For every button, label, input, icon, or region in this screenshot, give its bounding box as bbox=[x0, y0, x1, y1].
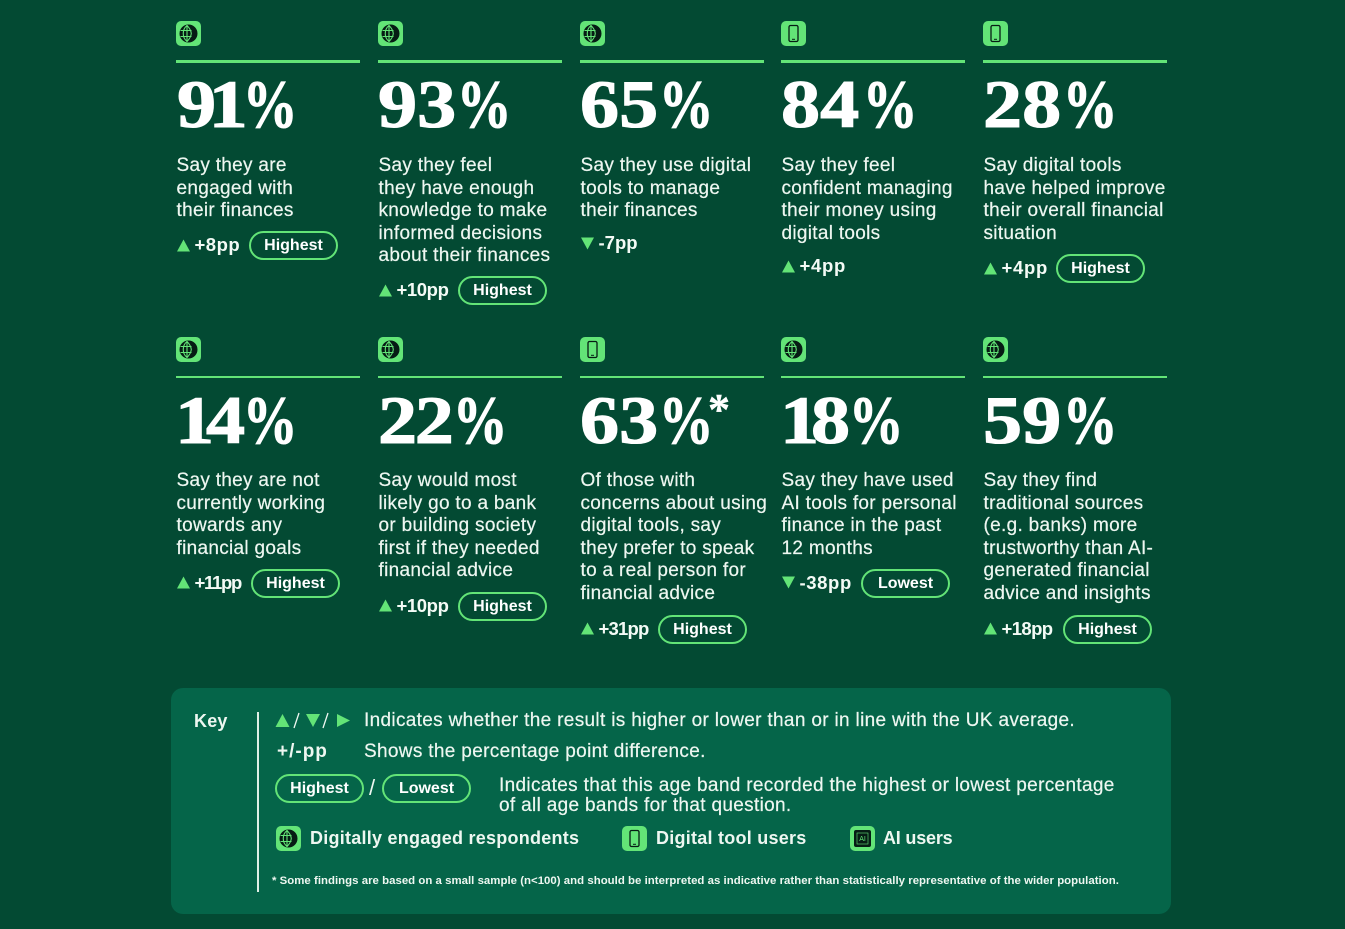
statistic: % bbox=[863, 66, 917, 142]
card: 91% engaged bbox=[176, 21, 360, 260]
legend: AI users: AI users bbox=[883, 828, 952, 848]
description: their money using bbox=[782, 200, 937, 221]
description: their finances bbox=[176, 200, 294, 221]
rule bbox=[580, 60, 764, 62]
description bbox=[378, 155, 550, 266]
statistic: % bbox=[453, 382, 507, 458]
card: 18% AI tools bbox=[781, 336, 965, 636]
delta and badge: +18pp bbox=[1002, 618, 1052, 638]
icon: phone legend bbox=[622, 826, 647, 851]
description: AI tools for personal bbox=[782, 492, 957, 514]
statistic bbox=[580, 66, 713, 142]
card: 65% use digital tools bbox=[580, 21, 764, 253]
description: financial goals bbox=[176, 538, 301, 558]
icon: globe legend bbox=[276, 826, 300, 851]
icon: globe bbox=[176, 21, 201, 46]
rule bbox=[176, 376, 360, 378]
icon: globe bbox=[378, 337, 403, 362]
highest badge bbox=[275, 774, 364, 803]
statistic bbox=[983, 380, 1133, 458]
statistic: 18 bbox=[780, 382, 842, 458]
description: digital tools, say bbox=[580, 515, 721, 536]
statistic: 14 bbox=[175, 382, 237, 458]
description: concerns about using bbox=[580, 492, 767, 514]
description bbox=[580, 470, 767, 604]
delta: -7pp bbox=[598, 232, 638, 253]
lowest badge: Lowest bbox=[399, 780, 454, 797]
delta and badge: +10pp bbox=[396, 279, 448, 300]
description: situation bbox=[984, 222, 1057, 244]
card: 14% no goals bbox=[175, 337, 360, 598]
statistic: % bbox=[1063, 66, 1117, 142]
delta and badge bbox=[379, 592, 547, 621]
delta and badge: Lowest bbox=[878, 574, 933, 592]
description: Say they find bbox=[984, 470, 1097, 491]
delta and badge bbox=[782, 568, 966, 598]
rule bbox=[176, 60, 360, 62]
description bbox=[176, 155, 294, 221]
description: 12 months bbox=[782, 538, 873, 558]
icon: globe bbox=[378, 21, 403, 46]
icon: phone bbox=[781, 21, 806, 46]
description: trustworthy than AI- bbox=[984, 538, 1153, 558]
statistic bbox=[175, 382, 297, 458]
statistic: 93 bbox=[378, 66, 456, 142]
statistic: % bbox=[659, 66, 713, 142]
delta and badge bbox=[177, 231, 338, 260]
description: advice and insights bbox=[984, 582, 1151, 604]
delta bbox=[581, 232, 638, 253]
statistic: 63 bbox=[580, 382, 658, 458]
statistic: 22 bbox=[378, 382, 452, 458]
description: Say they have used bbox=[782, 470, 954, 491]
icon: phone bbox=[580, 337, 605, 362]
card: 84% confident bbox=[781, 21, 965, 276]
statistic bbox=[781, 380, 931, 458]
statistic: 65 bbox=[580, 66, 658, 142]
pp explanation: Shows the percentage point difference. bbox=[364, 741, 706, 762]
delta and badge: Highest bbox=[1071, 260, 1130, 277]
delta and badge: -38pp bbox=[800, 572, 852, 592]
description: engaged with bbox=[176, 178, 293, 198]
icon: AI chip legend bbox=[850, 826, 874, 851]
description: currently working bbox=[176, 492, 325, 514]
statistic: % bbox=[1063, 382, 1117, 458]
statistic bbox=[177, 66, 297, 142]
statistic bbox=[983, 66, 1117, 142]
rule bbox=[983, 376, 1167, 378]
delta and badge: Highest bbox=[673, 620, 732, 638]
delta and badge: Highest bbox=[473, 598, 532, 614]
description: financial advice bbox=[378, 560, 513, 581]
panel: key bbox=[171, 688, 1171, 914]
description: Say digital tools bbox=[984, 155, 1122, 176]
legend: digital tool users: Digital tool users bbox=[656, 828, 807, 848]
card: 22% bank first bbox=[378, 337, 562, 621]
delta and badge: +4pp bbox=[1002, 257, 1048, 278]
statistic bbox=[378, 382, 507, 458]
description: (e.g. banks) more bbox=[984, 515, 1138, 536]
direction explanation: Indicates whether the result is higher or lower than or in line with the UK average. bbox=[364, 710, 1075, 731]
description: tools to manage bbox=[580, 178, 720, 198]
description: traditional sources bbox=[984, 492, 1143, 514]
slash: / bbox=[369, 775, 375, 800]
icon: globe bbox=[781, 336, 806, 362]
delta: +4pp bbox=[800, 255, 846, 276]
delta and badge: Highest bbox=[473, 282, 532, 299]
rule bbox=[378, 376, 562, 378]
description bbox=[580, 155, 751, 221]
lowest badge bbox=[382, 774, 471, 803]
card: 93% knowledge bbox=[378, 21, 562, 305]
description: knowledge to make bbox=[378, 200, 547, 221]
description: to a real person for bbox=[580, 560, 746, 581]
description: Say they are bbox=[176, 155, 287, 176]
description bbox=[378, 470, 540, 581]
card: 28% improved situation bbox=[983, 21, 1167, 283]
statistic: 59 bbox=[983, 382, 1061, 458]
footnote: * Some findings are based on a small sample (n<100) and should be interpreted as indicative rather than statistically representative of the wider population. bbox=[272, 875, 1119, 887]
description bbox=[176, 470, 325, 558]
delta and badge: Highest bbox=[264, 237, 323, 254]
statistic: % bbox=[243, 382, 297, 458]
description: informed decisions bbox=[378, 222, 542, 244]
description bbox=[984, 155, 1166, 244]
delta and badge bbox=[984, 614, 1168, 644]
statistic bbox=[378, 66, 511, 142]
card: 63% real person bbox=[580, 337, 767, 644]
delta and badge: Highest bbox=[1078, 620, 1137, 638]
description bbox=[984, 470, 1153, 605]
badge explanation: Indicates that this age band recorded the highest or lowest percentage bbox=[499, 775, 1115, 796]
description: they prefer to speak bbox=[580, 538, 754, 558]
rule bbox=[781, 376, 965, 378]
description: Say they feel bbox=[782, 155, 895, 176]
description: digital tools bbox=[782, 222, 880, 244]
description: financial advice bbox=[580, 582, 715, 604]
delta and badge: +11pp bbox=[194, 572, 241, 592]
delta and badge bbox=[379, 276, 547, 305]
description: Say they use digital bbox=[580, 155, 751, 176]
statistic: % bbox=[243, 66, 297, 142]
statistic: 84 bbox=[781, 66, 859, 142]
description: Say they are not bbox=[176, 470, 320, 491]
legend: digitally engaged: Digitally engaged respondents bbox=[310, 828, 579, 848]
statistic: 28 bbox=[983, 66, 1061, 142]
description: towards any bbox=[176, 515, 282, 536]
description: first if they needed bbox=[378, 538, 540, 558]
description bbox=[782, 155, 953, 244]
icon: direction arrows bbox=[275, 712, 351, 730]
description: Of those with bbox=[580, 470, 695, 491]
description: generated financial bbox=[984, 560, 1150, 581]
badge explanation bbox=[499, 776, 1115, 816]
description: Say would most bbox=[378, 470, 517, 491]
description: they have enough bbox=[378, 178, 534, 198]
rule bbox=[378, 60, 562, 62]
icon: globe bbox=[983, 336, 1008, 362]
statistic: % bbox=[457, 66, 511, 142]
description: about their finances bbox=[378, 245, 550, 266]
icon: phone bbox=[983, 21, 1008, 46]
rule bbox=[781, 60, 965, 62]
statistic: * bbox=[708, 384, 730, 434]
badge explanation: of all age bands for that question. bbox=[499, 795, 792, 816]
statistic bbox=[781, 66, 917, 142]
icon: globe bbox=[580, 21, 605, 46]
description: have helped improve bbox=[984, 178, 1166, 198]
description: Say they feel bbox=[378, 155, 492, 176]
key heading: Key bbox=[194, 711, 228, 731]
rule bbox=[983, 60, 1167, 62]
statistic: % bbox=[659, 382, 713, 458]
description: confident managing bbox=[782, 178, 953, 198]
delta and badge: +10pp bbox=[396, 594, 448, 616]
description: likely go to a bank bbox=[378, 492, 536, 514]
description: finance in the past bbox=[782, 515, 941, 536]
description bbox=[782, 470, 957, 560]
delta and badge bbox=[984, 254, 1145, 283]
card: 59% traditional sources bbox=[983, 336, 1167, 636]
statistic: % bbox=[849, 382, 903, 458]
delta and badge bbox=[177, 569, 340, 598]
statistic: 91 bbox=[177, 66, 240, 142]
pp label: +/-pp bbox=[277, 741, 328, 762]
icon: AI chip legend: AI bbox=[859, 836, 865, 843]
delta and badge: +8pp bbox=[194, 234, 240, 255]
icon: globe bbox=[176, 337, 201, 362]
delta and badge: Highest bbox=[266, 574, 325, 592]
key divider bbox=[257, 712, 258, 892]
description: their overall financial bbox=[984, 200, 1164, 221]
delta and badge bbox=[581, 615, 747, 644]
description: or building society bbox=[378, 515, 536, 536]
statistic bbox=[580, 382, 730, 458]
highest badge: Highest bbox=[290, 780, 349, 797]
delta and badge: +31pp bbox=[598, 618, 648, 638]
rule bbox=[580, 376, 764, 378]
description: their finances bbox=[580, 200, 698, 221]
